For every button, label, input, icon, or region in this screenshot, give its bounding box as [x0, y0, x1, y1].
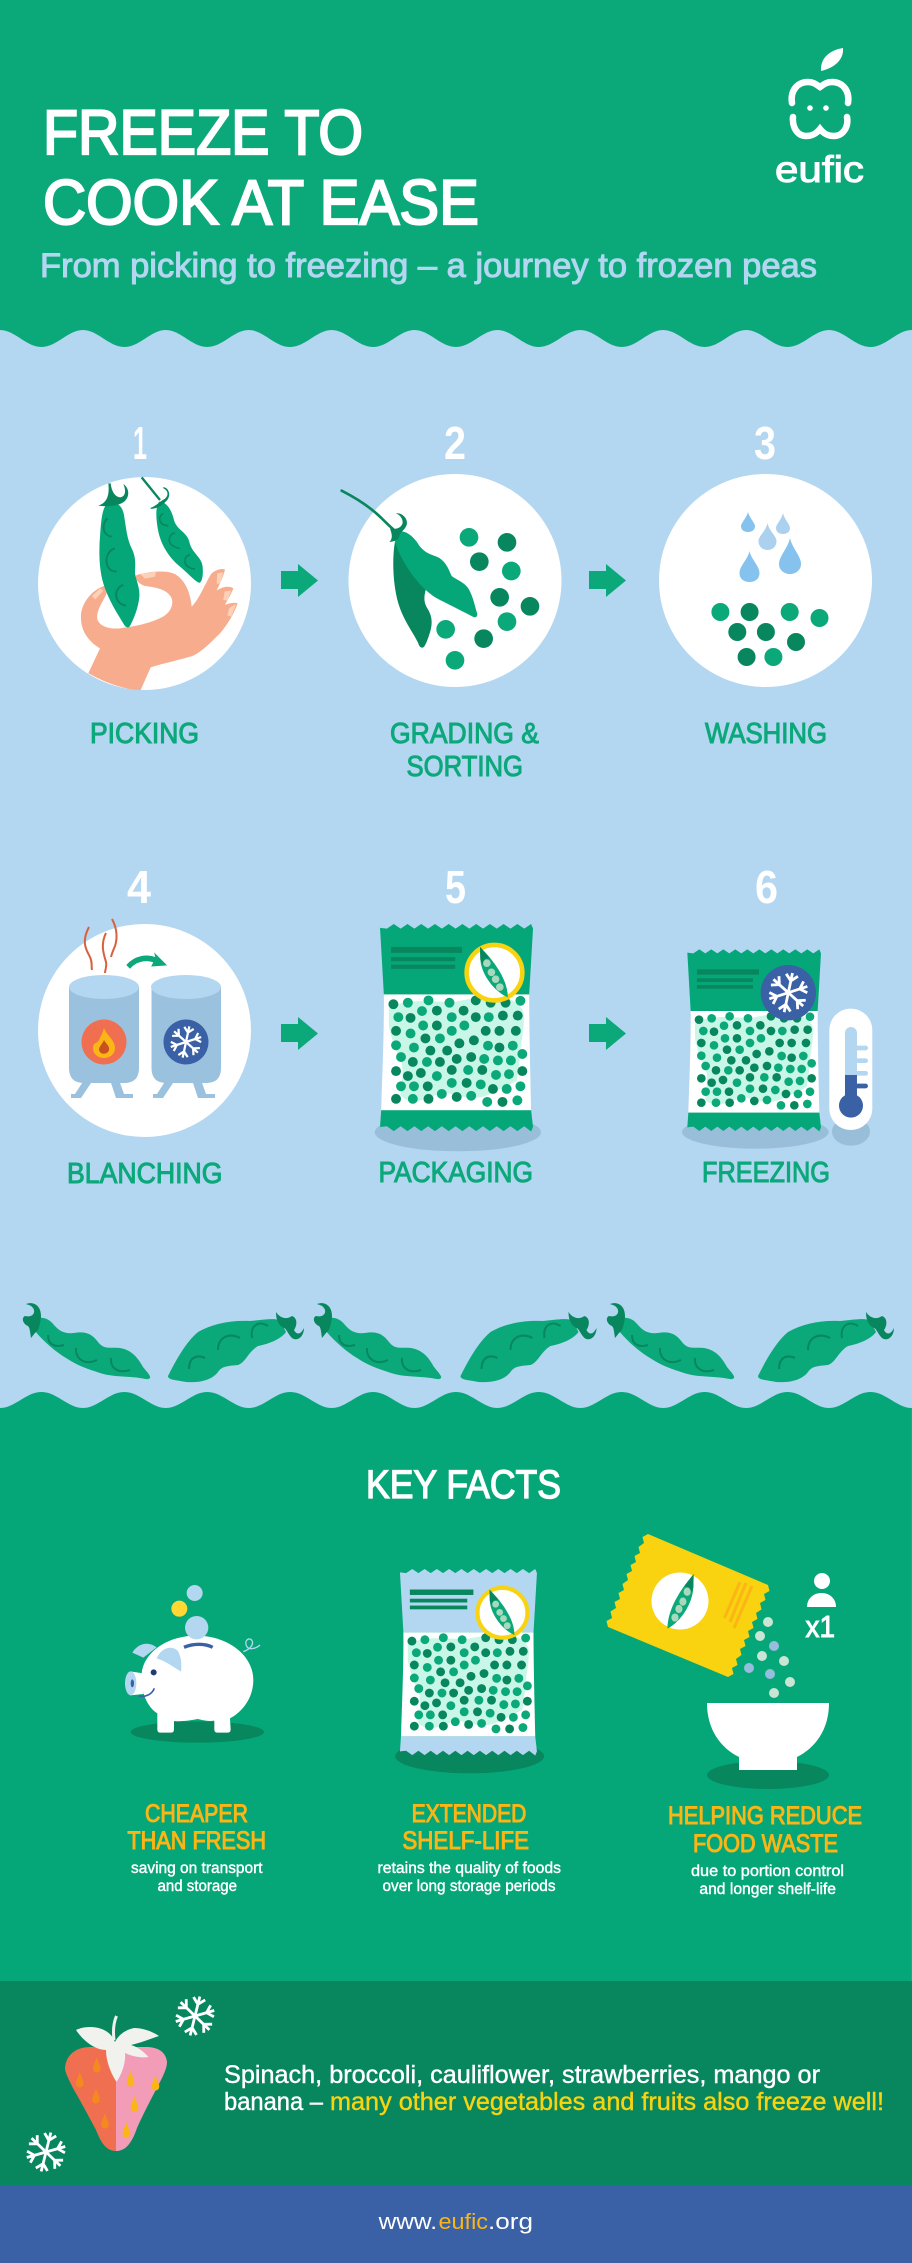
icon: person x1	[806, 1573, 836, 1644]
title	[43, 98, 479, 238]
text: due to portion control: due to portion control	[691, 1863, 844, 1880]
label: washing: WASHING	[705, 718, 827, 750]
text: other foods	[224, 2061, 884, 2116]
arrow	[589, 1017, 626, 1050]
text: retains the quality: retains the quality of foods	[378, 1860, 561, 1877]
step 2: grading and sorting	[342, 417, 562, 783]
heading: extended shelf-life: SHELF-LIFE	[402, 1827, 529, 1855]
fact: helping reduce food waste	[606, 1534, 862, 1898]
icon: pea bag with seal	[375, 924, 541, 1151]
arrow	[281, 564, 318, 597]
arrow	[281, 1017, 318, 1050]
pea pod row	[23, 1303, 894, 1382]
label: packaging: PACKAGING	[378, 1157, 533, 1189]
icon: eufic logo: eufic	[775, 149, 864, 190]
heading: helping reduce food waste	[668, 1802, 862, 1858]
step 3: washing	[659, 417, 872, 750]
text: other foods: Spinach, broccoli, cauliflower, strawberries, mango or	[224, 2061, 820, 2089]
icon: strawberry	[65, 2016, 167, 2151]
icon: falling peas	[744, 1617, 795, 1698]
heading: cheaper than fresh: THAN FRESH	[127, 1827, 266, 1855]
icon: bowl	[707, 1703, 829, 1789]
panel: key facts	[0, 1392, 912, 1981]
icon: pea bag	[395, 1569, 544, 1773]
number 3: 3	[754, 417, 776, 469]
fact: cheaper than fresh	[125, 1585, 266, 1895]
heading: cheaper than fresh	[127, 1800, 266, 1855]
text: saving on transport	[131, 1860, 263, 1895]
heading: key facts: KEY FACTS	[366, 1463, 561, 1507]
text: website: www.	[377, 2209, 437, 2234]
number 6: 6	[755, 861, 778, 913]
icon: person x1: x1	[806, 1609, 835, 1644]
heading: extended shelf-life	[402, 1800, 529, 1855]
step 6: freezing	[682, 861, 872, 1189]
label: grading and sorting: SORTING	[406, 751, 523, 783]
icon: pea pod and loose peas	[342, 474, 562, 687]
number 4: 4	[127, 861, 151, 913]
icon: piggy bank	[125, 1585, 264, 1743]
heading: helping reduce food waste: HELPING REDUCE	[668, 1802, 862, 1830]
title: FREEZE TO	[43, 98, 363, 168]
icon: snowflake upper	[170, 1992, 220, 2040]
icon: blanching tanks	[38, 919, 251, 1137]
label: picking: PICKING	[90, 718, 199, 750]
number 5: 5	[445, 861, 466, 913]
number 1: 1	[133, 417, 147, 469]
icon: water drops and peas	[659, 474, 872, 687]
panel: footer	[0, 2185, 912, 2263]
label: grading and sorting: GRADING &	[390, 718, 539, 750]
heading: helping reduce food waste: FOOD WASTE	[693, 1830, 838, 1858]
heading: extended shelf-life: EXTENDED	[412, 1800, 526, 1828]
label: blanching: BLANCHING	[67, 1158, 222, 1190]
number 2: 2	[444, 417, 466, 469]
text: website: .org	[488, 2209, 533, 2234]
arrow	[589, 564, 626, 597]
icon: snowflake lower	[21, 2128, 71, 2176]
panel: other foods band	[0, 1981, 912, 2185]
text: website: eufic	[438, 2209, 488, 2234]
step 4: blanching	[38, 861, 251, 1190]
icon: eufic logo	[775, 48, 864, 190]
text: other foods: banana –	[224, 2088, 323, 2116]
text: due to portion control	[691, 1863, 844, 1898]
step 1: picking	[38, 417, 251, 750]
icon: yellow pea pack	[606, 1534, 770, 1677]
text: due to portion control: and longer shelf-life	[699, 1881, 836, 1898]
text: saving on transport: saving on transport	[131, 1860, 263, 1877]
text: other foods: many other vegetables and fruits also freeze well!	[330, 2088, 884, 2116]
text: saving on transport: and storage	[158, 1878, 237, 1895]
label: freezing: FREEZING	[702, 1157, 830, 1189]
text: website	[377, 2209, 533, 2234]
title: COOK AT EASE	[43, 168, 479, 238]
text: retains the quality: over long storage periods	[382, 1878, 556, 1895]
label: grading and sorting	[390, 718, 539, 783]
heading: cheaper than fresh: CHEAPER	[145, 1800, 248, 1828]
panel: header	[0, 0, 912, 347]
step 5: packaging	[375, 861, 541, 1189]
text: retains the quality	[378, 1860, 561, 1895]
fact: extended shelf-life	[378, 1569, 561, 1895]
subtitle: From picking to freezing – a journey to frozen peas	[40, 247, 817, 285]
icon: hand picking peas	[38, 477, 251, 690]
icon: frozen bag and thermometer	[682, 949, 872, 1149]
